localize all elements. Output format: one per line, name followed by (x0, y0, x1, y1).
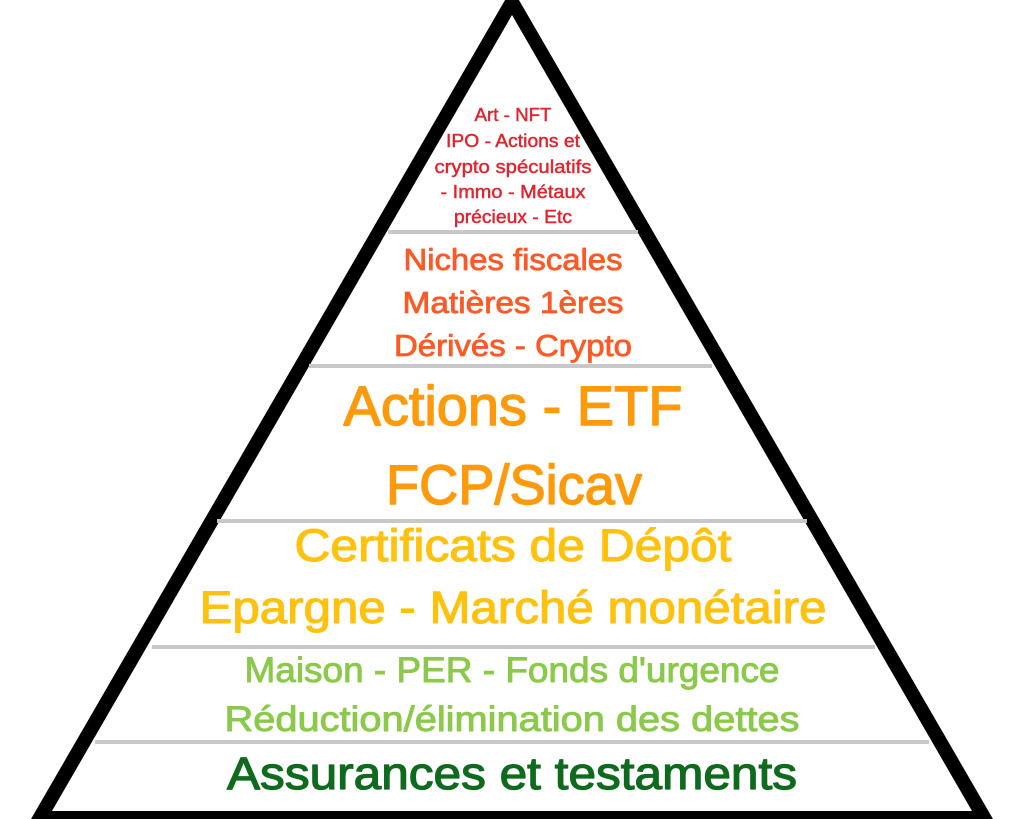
tier 5: tax niches, commodities, derivatives: Niches fiscales (404, 242, 622, 277)
tier 6: speculative assets: IPO - Actions et (446, 130, 580, 151)
tier 1: insurance and wills: Assurances et testaments (227, 748, 797, 799)
tier 2: home, retirement, emergency fund, debt: Maison - PER - Fonds d'urgence (244, 651, 780, 690)
tier 5: tax niches, commodities, derivatives: Dérivés - Crypto (394, 328, 632, 363)
tier 6: speculative assets: précieux - Etc (454, 206, 572, 227)
tier 6: speculative assets: crypto spéculatifs (434, 156, 592, 177)
tier 5: tax niches, commodities, derivatives (394, 242, 632, 363)
tier dividers (95, 230, 929, 744)
tier 3: savings and money market: Certificats de Dépôt (294, 520, 732, 571)
tier 2: home, retirement, emergency fund, debt: Réduction/élimination des dettes (224, 700, 800, 739)
tier 3: savings and money market (200, 520, 826, 633)
tier 4: equities and funds: Actions - ETF (344, 374, 682, 437)
tier 6: speculative assets: Art - NFT (474, 104, 552, 125)
tier 4: equities and funds: FCP/Sicav (386, 453, 642, 516)
tier 6: speculative assets (434, 104, 592, 227)
tier 3: savings and money market: Epargne - Marché monétaire (200, 582, 826, 633)
tier 2: home, retirement, emergency fund, debt (224, 651, 800, 739)
tier 4: equities and funds (344, 374, 682, 516)
tier 6: speculative assets: - Immo - Métaux (440, 181, 586, 202)
tier 5: tax niches, commodities, derivatives: Matières 1ères (402, 285, 624, 320)
